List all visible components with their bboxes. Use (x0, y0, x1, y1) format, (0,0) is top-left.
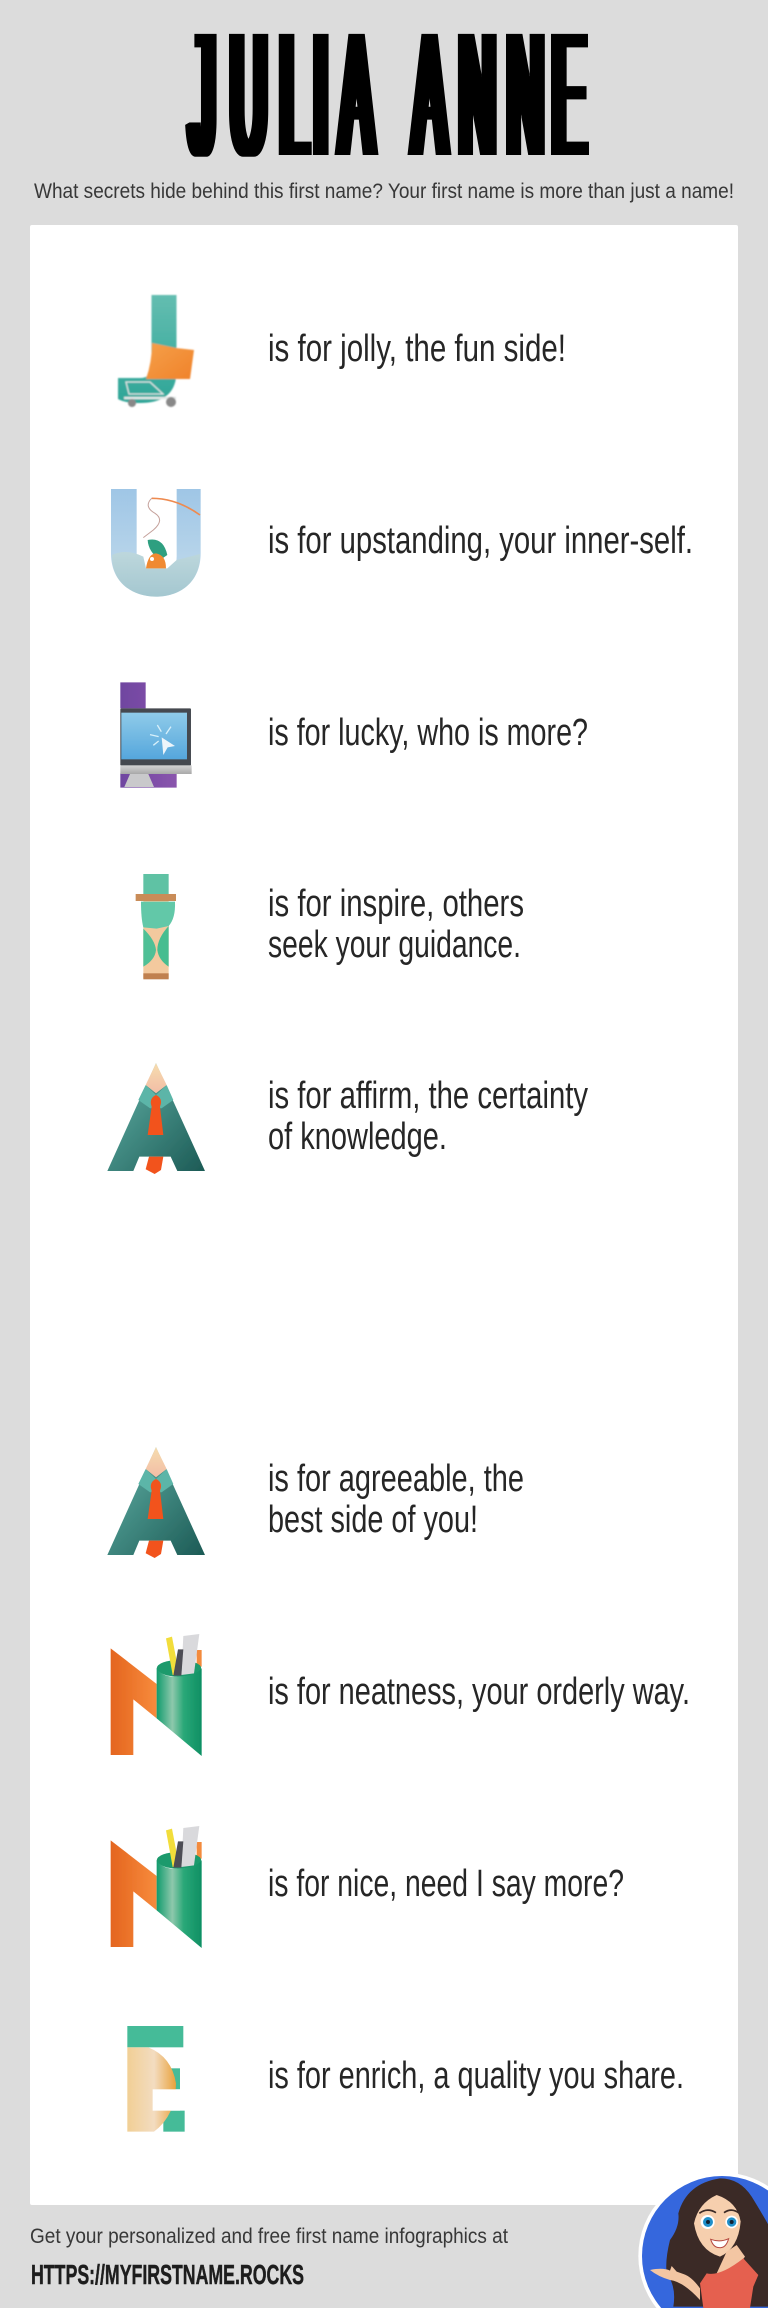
row: A (agreeable) (107, 1447, 524, 1558)
avatar: cartoon woman in circle (638, 2172, 768, 2308)
text: A (268, 1075, 588, 1158)
icon: letter L with computer (120, 682, 192, 788)
row: I (136, 874, 524, 979)
row: L (120, 682, 588, 788)
icon: letter I hourglass (136, 874, 176, 979)
text: A: best side of you! (268, 1499, 478, 1541)
row: A (affirm) (107, 1063, 588, 1174)
text: N: is for nice, need I say more? (268, 1863, 624, 1905)
icon: letter A with tie (107, 1063, 205, 1174)
icon: letter E with coin (127, 2026, 185, 2132)
icon: letter N with pencil cup (111, 1634, 202, 1756)
text: A (268, 1458, 524, 1541)
text: J: is for jolly, the fun side! (268, 328, 566, 370)
title: JULIA ANNE (190, 0, 586, 193)
text: I: is for inspire, others (268, 883, 524, 925)
icon: letter A with tie (107, 1447, 205, 1558)
row: E (127, 2026, 684, 2132)
icon: letter N with pencil cup (111, 1826, 202, 1948)
row: N (nice) (111, 1826, 624, 1948)
footer prompt: Get your personalized and free first name infographics at (30, 2225, 508, 2248)
row: N (neatness) (111, 1634, 690, 1756)
row: J (118, 295, 566, 407)
text: A: is for agreeable, the (268, 1458, 524, 1500)
text: A: is for affirm, the certainty (268, 1075, 588, 1117)
icon: letter J with shopping cart (118, 295, 194, 407)
text: A: of knowledge. (268, 1116, 447, 1158)
text: L: is for lucky, who is more? (268, 712, 588, 754)
row: U (111, 489, 693, 597)
icon: letter U with fishing rod (111, 489, 201, 597)
footer url: HTTPS://MYFIRSTNAME.ROCKS (31, 2259, 304, 2290)
text: I: seek your guidance. (268, 924, 521, 966)
text: I (268, 883, 524, 966)
panel: letters (30, 225, 738, 2205)
